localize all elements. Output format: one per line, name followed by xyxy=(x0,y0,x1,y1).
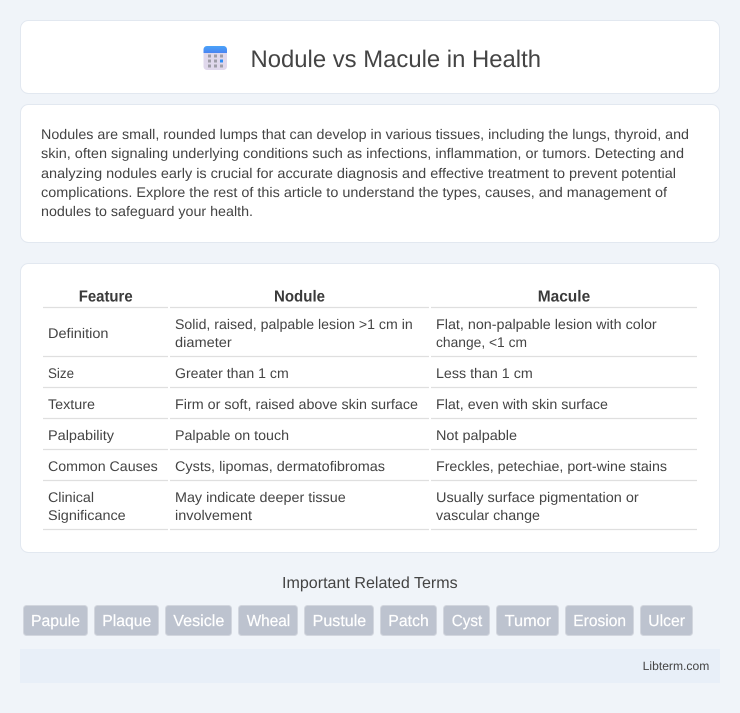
text block: intro: nodules to safeguard your health. xyxy=(41,203,253,219)
tag: Wheal xyxy=(238,606,298,636)
row: palpability: Palpability xyxy=(48,427,114,443)
tag: Vesicle: Vesicle xyxy=(173,613,224,630)
row: palpability xyxy=(48,427,517,443)
text block: intro: Nodules are small, rounded lumps that can develop in various tissues, including the lungs, thyroid, and xyxy=(41,126,689,142)
tag: Wheal: Wheal xyxy=(247,613,290,630)
tag: Ulcer: Ulcer xyxy=(648,613,686,630)
row: size: Size xyxy=(48,365,74,381)
tag: Cyst: Cyst xyxy=(452,613,483,630)
row: common causes: Cysts, lipomas, dermatofibromas xyxy=(175,458,385,474)
row: texture: Flat, even with skin surface xyxy=(436,396,608,412)
text block: intro: analyzing nodules early is crucial for accurate diagnosis and effective treatment to prevent potential xyxy=(41,165,676,181)
tag: Tumor xyxy=(496,606,558,636)
tag: Tumor: Tumor xyxy=(505,613,552,630)
icon: calendar xyxy=(204,46,227,70)
row: size xyxy=(48,365,533,381)
row: palpability: Not palpable xyxy=(436,427,517,443)
tag: Plaque xyxy=(94,606,158,636)
tag: Pustule: Pustule xyxy=(313,613,366,630)
row: common causes xyxy=(48,458,667,474)
text block: intro: complications. Explore the rest of this article to understand the types, causes, and management of xyxy=(41,184,667,200)
row: texture: Texture xyxy=(48,396,95,412)
row: size: Greater than 1 cm xyxy=(175,365,289,381)
text block: intro: skin, often signaling underlying conditions such as infections, inflammation, or tumors. Detecting and xyxy=(41,145,684,161)
row: clinical significance: May indicate deeper tissue xyxy=(175,489,346,505)
row: palpability: Palpable on touch xyxy=(175,427,289,443)
row: definition: change, <1 cm xyxy=(436,334,527,350)
tag: Erosion: Erosion xyxy=(573,613,626,630)
tag: Vesicle xyxy=(166,606,232,636)
row: size: Less than 1 cm xyxy=(436,365,533,381)
row: common causes: Common Causes xyxy=(48,458,158,474)
table header: Feature xyxy=(79,288,133,306)
text block: intro xyxy=(41,126,689,219)
row: clinical significance: Usually surface pigmentation or xyxy=(436,489,639,505)
row: clinical significance: involvement xyxy=(175,507,252,523)
footer xyxy=(20,649,720,683)
row: clinical significance xyxy=(48,489,639,523)
row: clinical significance: vascular change xyxy=(436,507,540,523)
tag: Cyst xyxy=(444,606,490,636)
row: definition xyxy=(48,316,657,350)
panel: intro paragraph xyxy=(20,104,720,242)
title: Nodule vs Macule in Health xyxy=(250,46,541,73)
row: common causes: Freckles, petechiae, port-wine stains xyxy=(436,458,667,474)
row: definition: Flat, non-palpable lesion with color xyxy=(436,316,657,332)
tag: Papule xyxy=(24,606,88,636)
tag: Patch: Patch xyxy=(388,613,429,630)
table header: Nodule xyxy=(274,288,325,306)
table header: Macule xyxy=(538,288,590,306)
tag: Patch xyxy=(380,606,436,636)
tag: Erosion xyxy=(566,606,634,636)
tag: Papule: Papule xyxy=(31,613,80,630)
row: clinical significance: Significance xyxy=(48,507,126,523)
panel: header xyxy=(20,20,720,94)
related terms tags xyxy=(24,606,692,636)
tag: Plaque: Plaque xyxy=(102,613,151,630)
row: clinical significance: Clinical xyxy=(48,489,94,505)
row: texture: Firm or soft, raised above skin surface xyxy=(175,396,418,412)
heading: important related terms: Important Related Terms xyxy=(282,575,458,592)
row: definition: Definition xyxy=(48,325,108,341)
tag: Ulcer xyxy=(640,606,692,636)
row: definition: Solid, raised, palpable lesion >1 cm in xyxy=(175,316,413,332)
row: definition: diameter xyxy=(175,334,232,350)
tag: Pustule xyxy=(304,606,374,636)
footer credit: Libterm.com xyxy=(643,659,709,673)
table header xyxy=(79,288,590,306)
row: texture xyxy=(48,396,608,412)
panel: comparison table xyxy=(20,264,720,552)
